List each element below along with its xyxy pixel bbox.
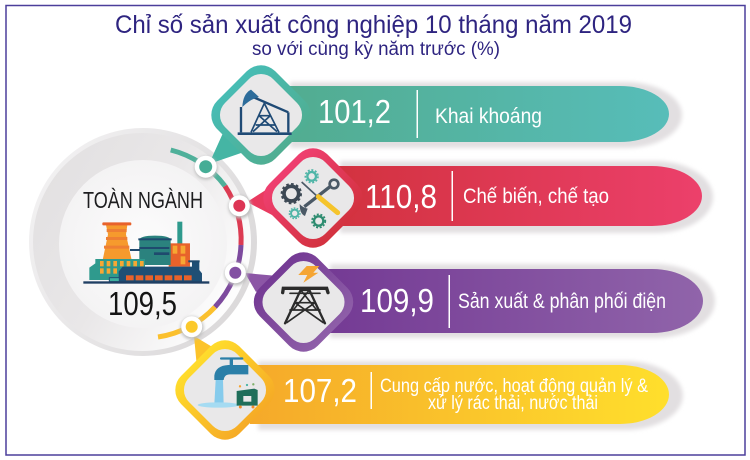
timeline node: manufacturing: [228, 195, 252, 218]
manufacturing label: Chế biến, chế tạo: [463, 184, 609, 208]
panel: overall index circle: [29, 128, 257, 356]
divider: [452, 171, 453, 221]
icon: power pylon: [283, 288, 328, 323]
bar shadow: [340, 161, 713, 233]
electricity value: 109,9: [360, 282, 434, 319]
water value: 107,2: [283, 372, 357, 409]
icon: gears and tools: [282, 170, 338, 228]
outer disc: [29, 128, 257, 356]
bar: [325, 269, 703, 333]
diamond: [203, 57, 319, 173]
subtitle: so với cùng kỳ năm trước (%): [252, 39, 500, 60]
diamond inner: [177, 342, 273, 438]
timeline node: mining: [194, 156, 218, 180]
timeline node: water: [180, 316, 204, 340]
bar shadow: [330, 264, 715, 338]
diamond inner: [213, 67, 309, 163]
bar: [335, 166, 702, 226]
title: Chỉ số sản xuất công nghiệp 10 tháng năm 2019: [115, 11, 632, 39]
mining value: 101,2: [318, 93, 391, 130]
manufacturing value: 110,8: [365, 178, 437, 215]
pointer: [194, 336, 214, 368]
water label line 2: xử lý rác thải, nước thải: [428, 393, 598, 414]
icon: water tap: [198, 357, 248, 408]
divider: [370, 372, 372, 409]
inner disc: [59, 160, 227, 328]
pointer: [209, 133, 244, 164]
bar: [285, 86, 669, 142]
panel: manufacturing: [247, 140, 713, 256]
diamond: [246, 244, 361, 360]
panel: electricity: [245, 244, 715, 360]
bar shadow: [290, 82, 682, 148]
diamond: [167, 332, 283, 448]
diamond inner: [265, 150, 361, 246]
divider: [416, 90, 418, 138]
pointer: [245, 273, 278, 292]
diamond inner: [255, 254, 352, 350]
timeline node: electricity: [224, 262, 248, 286]
icon: oil pump jack: [238, 90, 292, 134]
overall value: 109,5: [108, 285, 177, 322]
mining label: Khai khoáng: [435, 104, 542, 128]
bar shadow: [258, 361, 683, 430]
panel: water and waste: [167, 332, 683, 448]
grey ring: [33, 133, 251, 351]
panel: mining: [203, 57, 682, 173]
diamond: [255, 140, 371, 256]
bar: [250, 365, 669, 424]
icon: lightning bolt: [298, 266, 319, 283]
icon: waste bin: [237, 383, 258, 408]
pointer: [247, 186, 274, 216]
icon: factory: [83, 222, 209, 284]
overall label: TOÀN NGÀNH: [83, 187, 203, 213]
electricity label: Sản xuất & phân phối điện: [458, 289, 666, 313]
water label line 1: Cung cấp nước, hoạt động quản lý &: [380, 376, 648, 397]
divider: [448, 275, 450, 328]
timeline arc: [158, 150, 241, 337]
